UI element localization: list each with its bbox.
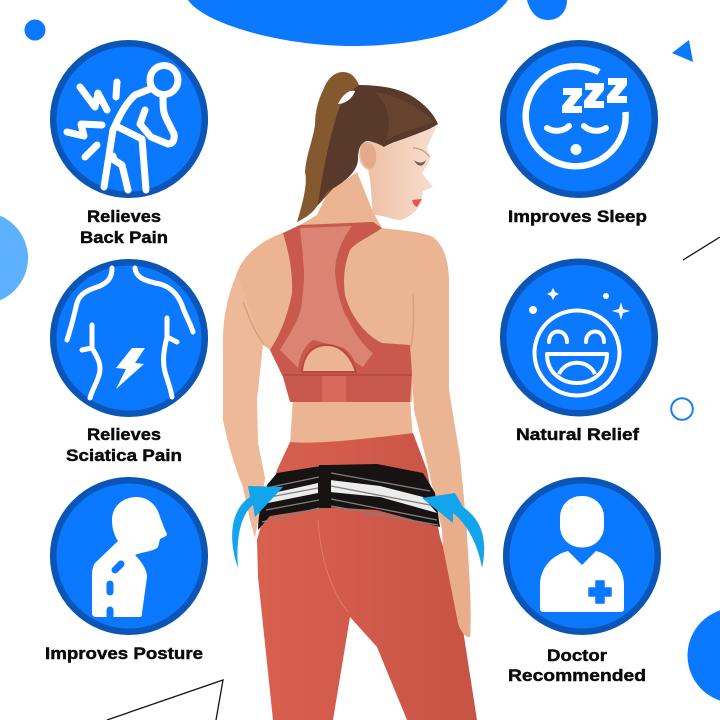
hair highlight [375,92,434,140]
left arm [223,273,265,538]
leggings [257,433,477,720]
hair tie gap [338,91,355,104]
eyebrow [413,148,430,157]
label line 2: Sciatica Pain [66,446,182,465]
ponytail [297,72,359,222]
label line 2: Back Pain [80,228,168,247]
label: Relieves [87,425,161,444]
decorative dot: top left [24,20,46,40]
badge circle [503,262,655,413]
right arm and hand [410,278,471,637]
neck and back skin [237,172,449,402]
panel: relieves back pain [53,43,205,247]
badge circle [53,43,205,195]
ear [360,142,376,169]
belt centre strap [319,465,331,508]
icon: torso with lightning [67,268,193,398]
woman wearing belt [223,72,484,720]
decorative circle: bottom right [688,608,720,703]
label: Doctor [547,646,607,665]
panel: improves posture [45,480,205,663]
leggings seam [318,520,348,612]
bra keyhole [302,345,356,372]
panel: improves sleep [503,43,655,226]
panel: doctor recommended [506,480,658,685]
decorative blob: top centre [188,0,508,46]
hair on head [318,85,438,205]
icon: sleeping face [526,66,627,166]
lips [412,199,422,207]
arm shadow [243,293,414,347]
badge circle [503,43,655,195]
icon: doctor [540,496,624,612]
panel: natural relief [503,262,655,444]
label: Improves Sleep [508,207,647,226]
bra mesh panel [280,226,373,368]
decorative ring [671,398,693,420]
bra band line [283,374,412,376]
decorative blob: top right [527,0,567,20]
right hand over leggings [442,510,471,637]
label: Relieves [87,207,161,226]
label: Improves Posture [45,644,203,663]
bra clasp [322,376,346,402]
decorative line: right [683,237,720,260]
decorative triangle outline: bottom left [107,680,223,720]
panel: relieves sciatica pain [53,262,205,465]
icon: laughing face [529,288,630,396]
belt [258,464,440,530]
waist skin [290,398,413,445]
badge circle [506,480,658,632]
badge circle [53,480,205,632]
label line 2: Recommended [508,666,646,685]
decorative circle: left light blue [0,212,28,304]
right arrow [422,493,484,568]
bra [270,222,412,402]
belt white stripes [268,480,437,513]
label: Natural Relief [516,425,639,444]
belt grey stripes [262,473,438,525]
left arrow [232,486,283,568]
icon: posture silhouette [92,497,167,618]
eye [414,160,426,166]
icon: person with back pain [67,66,178,190]
badge circle [53,262,205,414]
face [359,126,437,220]
decorative triangle [672,40,693,62]
